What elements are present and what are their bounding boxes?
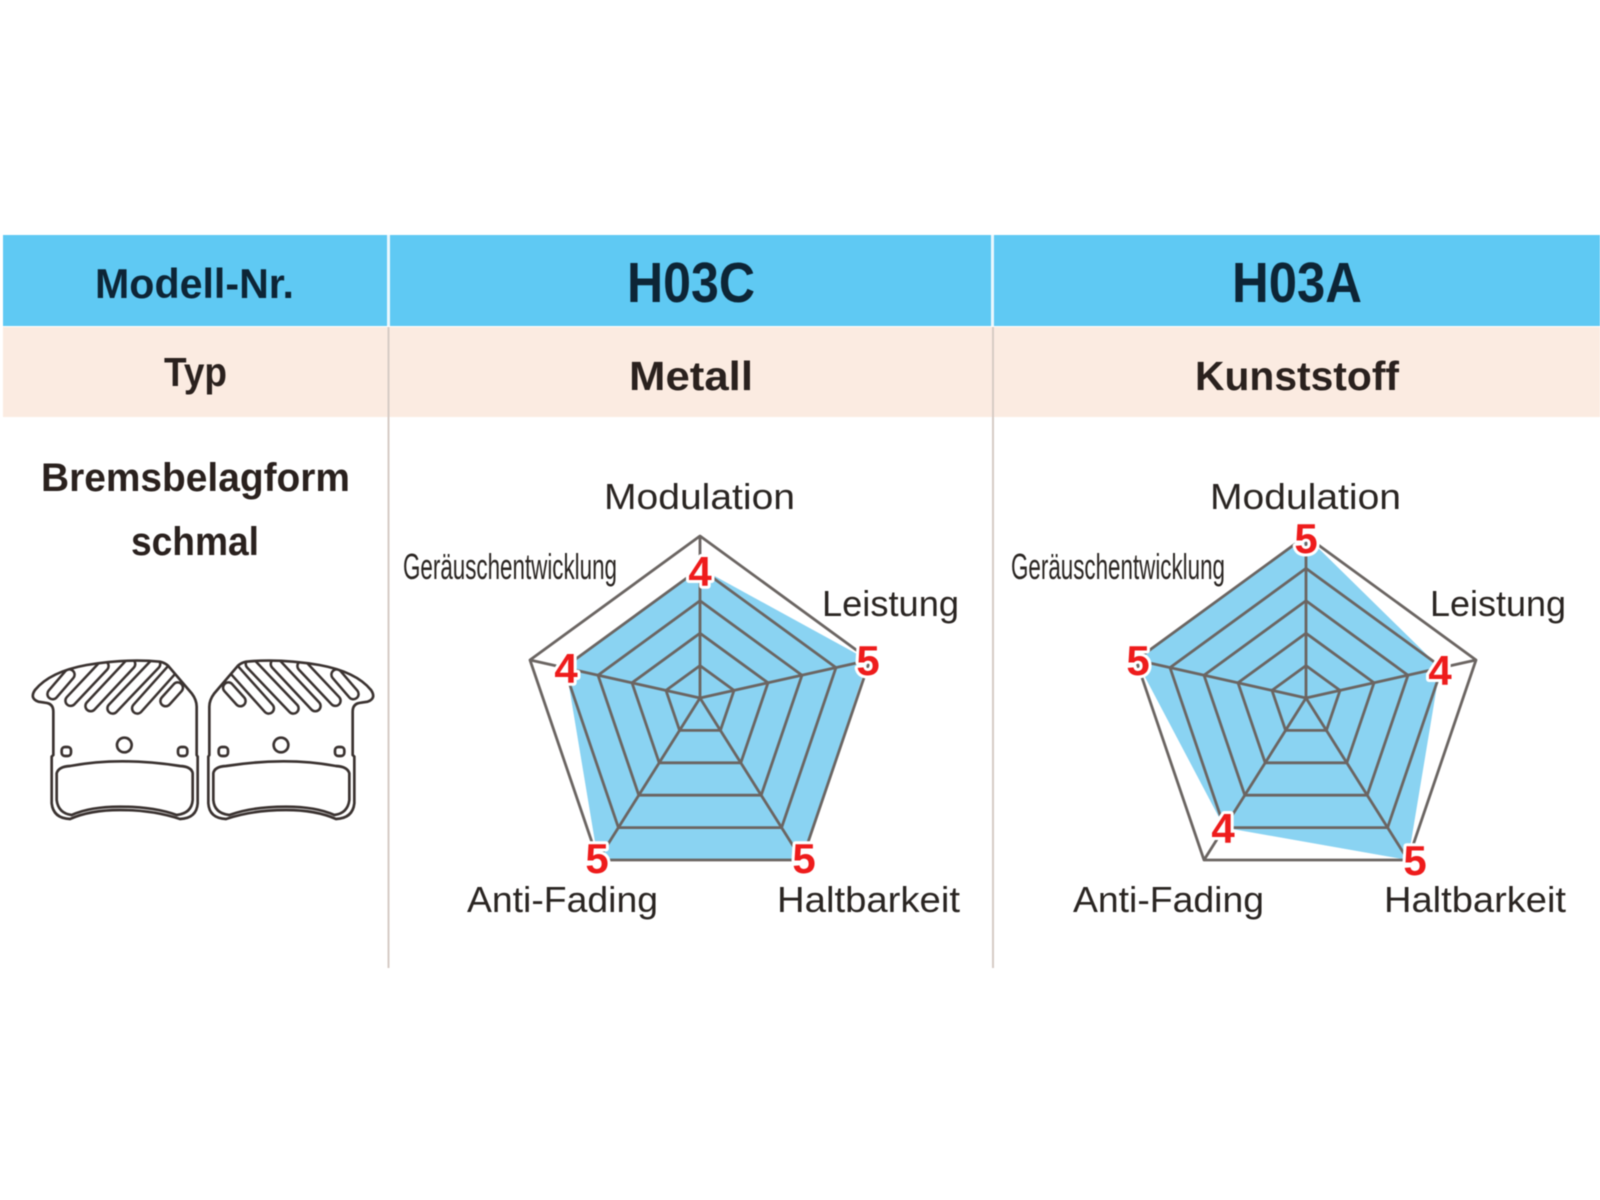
score values: H03A (1126, 515, 1452, 884)
icon: brake pads (33, 661, 373, 819)
pad shape heading: schmal (131, 520, 259, 564)
axis label: Modulation: Modulation (604, 476, 795, 517)
axis label: Leistung: Leistung (822, 583, 959, 624)
data area: H03C (566, 568, 868, 860)
type label: Kunststoff: Kunststoff (1195, 353, 1399, 399)
score values: H03A: 4 (1428, 647, 1452, 694)
score values: H03C: 5 (585, 835, 609, 882)
type label: Metall: Metall (629, 353, 753, 399)
radar grid: H03C (530, 536, 870, 860)
icon: left brake pad (33, 661, 198, 819)
axis label: Haltbarkeit: Haltbarkeit (1384, 879, 1566, 920)
icon: right brake pad (208, 661, 373, 819)
axis label: Leistung: Leistung (1430, 583, 1566, 624)
axis label: Anti-Fading: Anti-Fading (467, 879, 658, 920)
radar grid: H03A (1136, 536, 1476, 860)
score values: H03C: 4 (554, 645, 578, 692)
data area: H03A (1136, 536, 1440, 860)
axis label: Geräuschentwicklung: Geräuschentwicklung (1011, 546, 1225, 587)
type row (3, 327, 1600, 417)
score values: H03A: 4 (1211, 805, 1235, 852)
header label: H03C: H03C (627, 251, 755, 315)
header row: model number (3, 235, 1600, 326)
score values: H03C (554, 548, 880, 882)
score values: H03A: 5 (1403, 837, 1427, 884)
axis label: Modulation: Modulation (1210, 476, 1401, 517)
score values: H03C: 5 (856, 637, 880, 684)
radar chart: H03C (403, 476, 960, 920)
axis label: Anti-Fading: Anti-Fading (1073, 879, 1264, 920)
score values: H03C: 5 (792, 835, 816, 882)
score values: H03A: 5 (1294, 515, 1318, 562)
type label: Typ: Typ (164, 349, 227, 395)
pad shape heading: Bremsbelagform (41, 456, 350, 500)
score values: H03A: 5 (1126, 637, 1150, 684)
pad shape heading (41, 456, 350, 564)
axis label: Geräuschentwicklung: Geräuschentwicklung (403, 546, 617, 587)
header label: H03A: H03A (1232, 251, 1362, 315)
score values: H03C: 4 (688, 548, 712, 595)
header label: Modell-Nr.: Modell-Nr. (95, 260, 294, 307)
radar chart: H03A (1011, 476, 1566, 920)
axis label: Haltbarkeit: Haltbarkeit (777, 879, 960, 920)
